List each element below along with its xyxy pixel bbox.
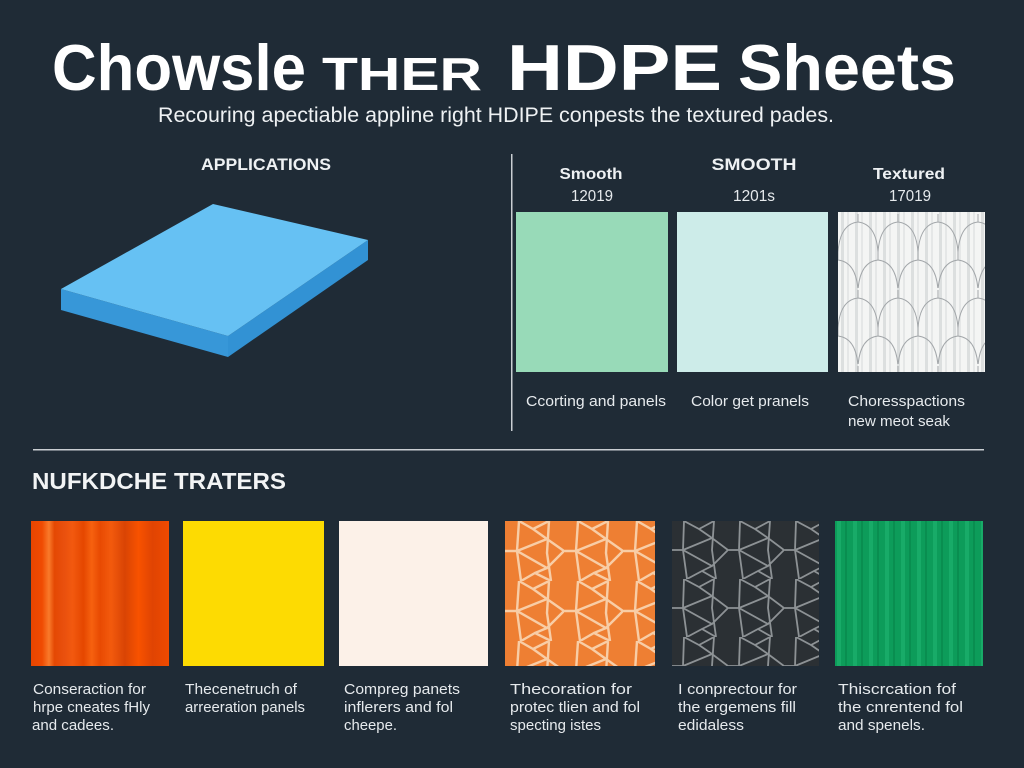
swatch: green ribbed: Thiscrcation fof bbox=[838, 681, 957, 698]
swatch: charcoal textured: edidaless bbox=[678, 717, 744, 734]
swatch: orange-red ribbed bbox=[31, 521, 169, 734]
swatch: orange textured: Thecoration for bbox=[510, 681, 632, 698]
title: HDPE bbox=[507, 31, 722, 104]
section heading: NUFKDCHE TRATERS bbox=[32, 468, 286, 494]
title: Sheets bbox=[738, 31, 956, 104]
title: THER bbox=[322, 48, 482, 100]
swatch: cream bbox=[339, 521, 488, 734]
column: smooth green bbox=[516, 166, 668, 410]
icon: blue HDPE sheet bbox=[61, 204, 368, 357]
swatch: orange textured bbox=[505, 521, 655, 734]
subtitle: Recouring apectiable appline right HDIPE conpests the textured pades. bbox=[158, 104, 834, 127]
title: Chowsle bbox=[52, 31, 306, 104]
swatch: cream: Compreg panets bbox=[344, 681, 460, 698]
column: textured bbox=[838, 166, 985, 430]
column: smooth pale: 1201s bbox=[733, 188, 775, 205]
column: smooth pale bbox=[677, 155, 828, 410]
swatch: yellow bbox=[183, 521, 324, 716]
panel: applications bbox=[61, 156, 368, 357]
swatch: cream: inflerers and fol bbox=[344, 699, 453, 716]
swatch: orange-red ribbed: Conseraction for bbox=[33, 681, 146, 698]
column: textured: Choresspactions bbox=[848, 393, 965, 410]
column: smooth green: 12019 bbox=[571, 188, 613, 205]
swatch: orange textured: specting istes bbox=[510, 717, 601, 734]
swatch: green ribbed bbox=[835, 521, 983, 734]
applications heading: APPLICATIONS bbox=[201, 156, 331, 174]
swatch: charcoal textured: I conprectour for bbox=[678, 681, 797, 698]
column: smooth green: Ccorting and panels bbox=[526, 393, 666, 410]
swatch: cream: cheepe. bbox=[344, 717, 397, 734]
column: smooth pale: SMOOTH bbox=[712, 155, 796, 174]
swatch: charcoal textured bbox=[672, 521, 819, 734]
column: smooth pale: Color get pranels bbox=[691, 393, 809, 410]
swatch: orange-red ribbed: and cadees. bbox=[32, 717, 114, 734]
swatch: orange-red ribbed: hrpe cneates fHly bbox=[33, 699, 150, 716]
column: smooth green: Smooth bbox=[560, 166, 622, 183]
swatch: yellow: arreeration panels bbox=[185, 699, 305, 716]
column: textured: new meot seak bbox=[848, 413, 950, 430]
swatch: yellow: Thecenetruch of bbox=[185, 681, 298, 698]
swatch: green ribbed: and spenels. bbox=[838, 717, 925, 734]
column: textured: 17019 bbox=[889, 188, 931, 205]
column: textured: Textured bbox=[873, 166, 945, 183]
panel: material swatches bbox=[31, 521, 983, 734]
panel: sheet comparison bbox=[516, 155, 985, 430]
swatch: charcoal textured: the ergemens fill bbox=[678, 699, 796, 716]
swatch: green ribbed: the cnrentend fol bbox=[838, 699, 963, 716]
title bbox=[52, 31, 956, 104]
swatch: orange textured: protec tlien and fol bbox=[510, 699, 640, 716]
